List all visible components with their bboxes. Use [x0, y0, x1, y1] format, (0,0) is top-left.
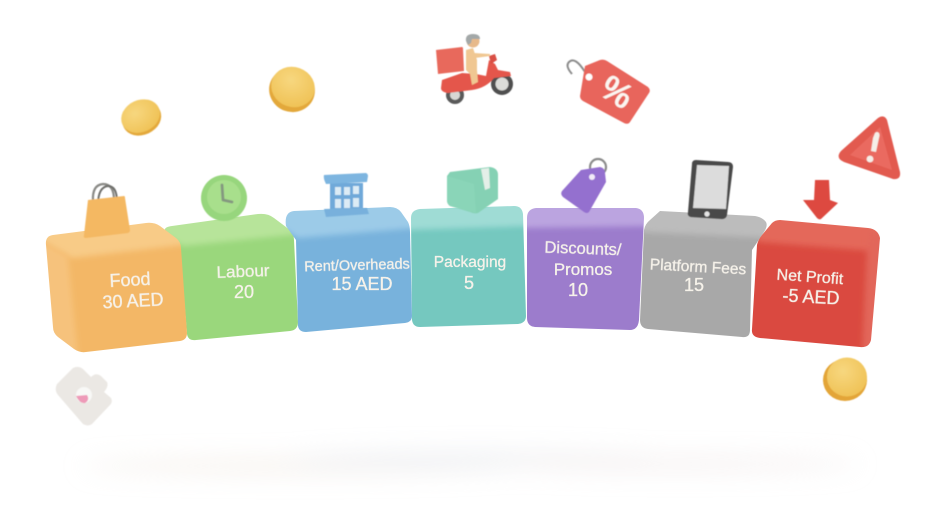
- icon: coin left: [116, 93, 167, 142]
- label: Food: Food: [109, 269, 151, 291]
- cube: Packaging: [411, 206, 526, 327]
- label: Rent/Overheads: Rent/Overheads: [304, 257, 410, 275]
- icon: office building: [324, 173, 369, 217]
- icon: clock: [201, 175, 247, 221]
- icon: package box: [447, 167, 498, 213]
- value: Packaging: 5: [464, 273, 474, 293]
- label: Discounts/: Discounts/: [544, 239, 622, 259]
- value: Rent: 15 AED: [331, 274, 393, 294]
- cube: Labour: [164, 214, 298, 340]
- percent sign: %: [593, 68, 640, 117]
- icon: shopping bag: [84, 184, 130, 238]
- icon: warning triangle: [839, 116, 900, 179]
- label: Labour: Labour: [216, 261, 270, 282]
- value: Labour: 20: [234, 282, 254, 302]
- value: Discounts: 10: [568, 280, 588, 300]
- icon: coin right: [823, 358, 867, 401]
- icon: delivery scooter: [436, 34, 513, 104]
- icon: coin top: [263, 61, 321, 119]
- icon: bandage piece: [56, 367, 112, 426]
- icon: down arrow: [803, 180, 838, 219]
- delivery box: [436, 47, 464, 74]
- label: Packaging: Packaging: [434, 254, 506, 271]
- icon: smartphone: [688, 160, 733, 219]
- icon: percent tag: [568, 60, 650, 124]
- icon: purple price tag: [561, 159, 606, 213]
- value: Platform Fees: 15: [684, 275, 704, 295]
- cube: Food: [46, 222, 187, 352]
- ground shadow: [80, 452, 860, 473]
- cube: Platform Fees: [640, 211, 767, 338]
- value: Net Profit: -5 AED: [782, 286, 840, 308]
- cube: Rent/Overheads: [286, 207, 412, 332]
- cube: Discounts/Promos: [527, 208, 644, 330]
- value: Food: 30 AED: [102, 289, 164, 313]
- label: Net Profit: Net Profit: [776, 267, 844, 288]
- cube: Net Profit: [752, 220, 880, 348]
- label: Promos: Promos: [554, 260, 612, 279]
- label: Platform Fees: Platform Fees: [649, 256, 747, 279]
